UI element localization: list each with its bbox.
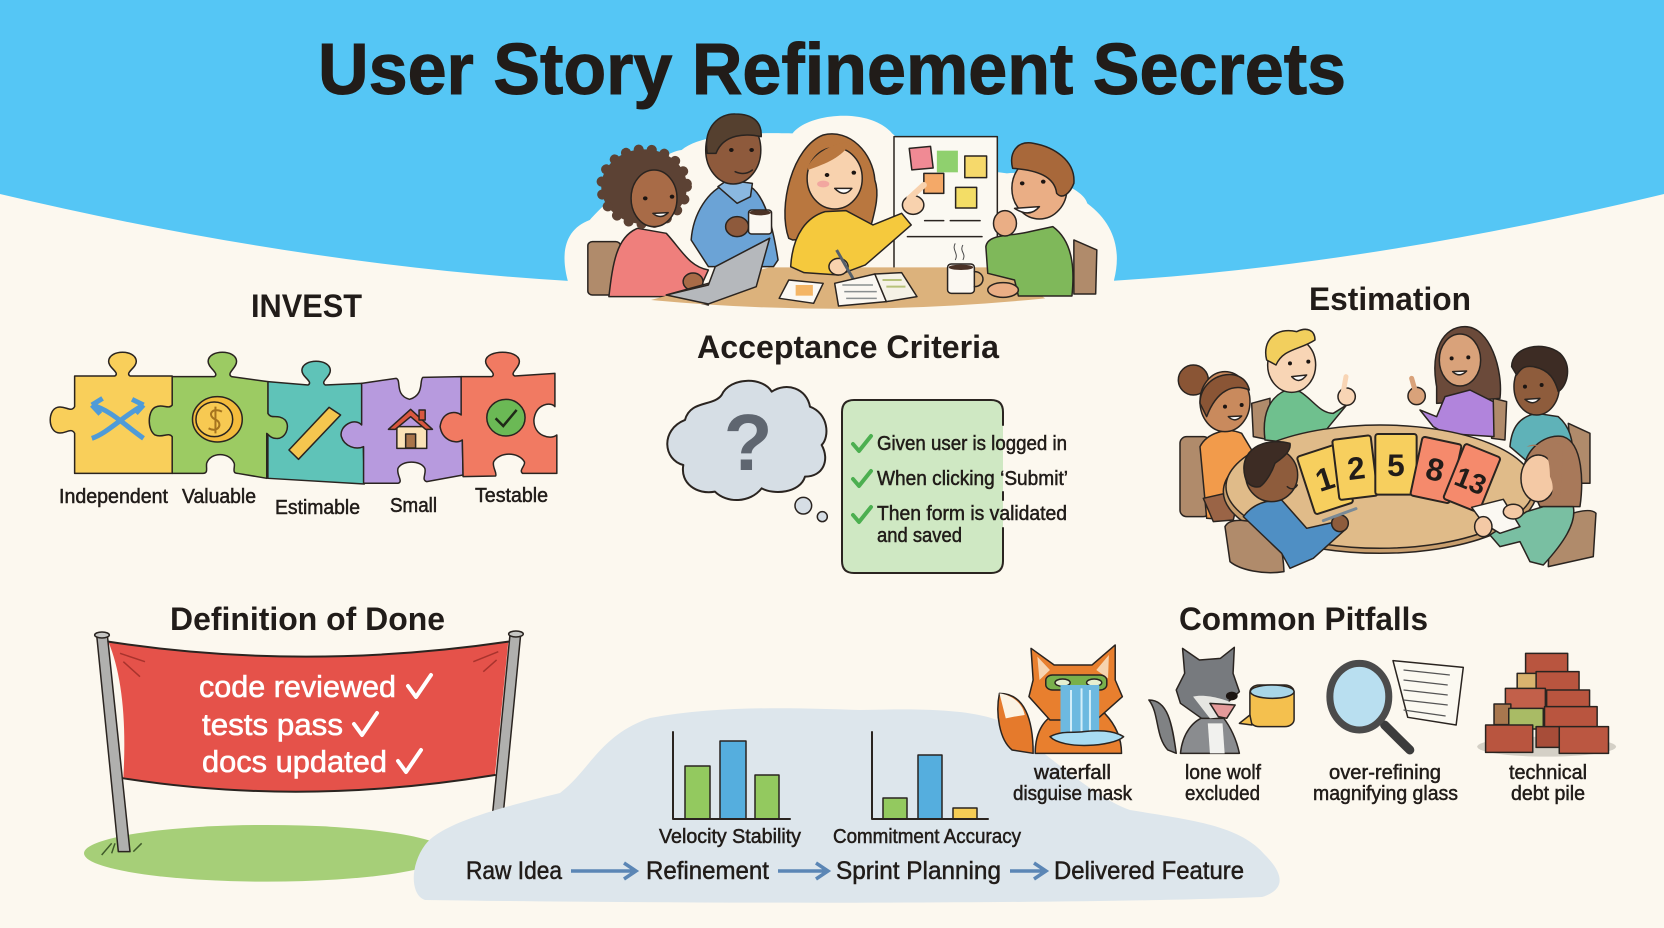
banner checklist text — [199, 669, 431, 779]
criteria text: When clicking ‘Submit’ — [877, 468, 1068, 490]
flow labels and arrows: Delivered Feature — [1054, 857, 1244, 885]
pitfall illustrations — [998, 645, 1616, 757]
heading: Common Pitfalls: Common Pitfalls — [1179, 601, 1428, 637]
piece: purple small — [341, 377, 463, 483]
piece labels — [59, 485, 548, 519]
person: long hair, purple — [1408, 327, 1507, 440]
card: 2 — [1332, 435, 1378, 500]
flow labels and arrows — [466, 857, 1244, 885]
icon: magnifying glass and document — [1330, 661, 1463, 750]
sky header band — [0, 0, 1664, 281]
banner checklist text: docs updated — [202, 744, 387, 779]
flow labels and arrows: Sprint Planning — [836, 857, 1001, 885]
pitfall labels: disguise mask — [1013, 783, 1133, 805]
person: front left, blue shirt — [1225, 442, 1356, 573]
piece: red testable — [440, 352, 557, 477]
piece: teal estimable — [268, 361, 364, 484]
pitfall labels: excluded — [1185, 783, 1260, 805]
flow labels and arrows: Raw Idea — [466, 857, 562, 885]
icon: lone wolf — [1149, 647, 1294, 753]
icon: thought cloud with question mark — [667, 381, 827, 522]
person: bun hair, orange — [1178, 365, 1252, 522]
grass — [84, 825, 449, 882]
card: 5: 5 — [1387, 447, 1405, 483]
acceptance criteria checklist card — [842, 400, 1068, 573]
title: User Story Refinement Secrets — [318, 30, 1346, 110]
piece labels: Small — [390, 495, 437, 517]
heading: Estimation: Estimation — [1309, 281, 1471, 317]
puzzle pieces — [50, 352, 557, 484]
person in yellow pointing at board — [785, 134, 924, 280]
criteria text: Then form is validated — [877, 503, 1067, 525]
card: 8: 8 — [1423, 450, 1447, 489]
banner checklist text: code reviewed — [199, 669, 396, 704]
pitfall labels: magnifying glass — [1313, 783, 1458, 805]
banner checklist text: tests pass — [202, 707, 343, 742]
person in blue shirt with mug — [691, 114, 778, 267]
round table — [1223, 425, 1537, 553]
heading: Definition of Done: Definition of Done — [170, 601, 445, 637]
criteria checks — [853, 436, 871, 522]
red banner cloth — [108, 642, 508, 792]
pitfall labels: lone wolf — [1185, 762, 1261, 784]
icon: technical debt brick pile — [1477, 653, 1616, 757]
section: Estimation — [1178, 281, 1596, 573]
pitfall labels: technical — [1509, 762, 1587, 784]
pitfall labels — [1013, 762, 1587, 805]
table — [651, 267, 1045, 309]
hero illustration: team refining stories — [565, 114, 1117, 323]
person with curly hair and laptop — [588, 149, 770, 305]
banner illustration — [84, 631, 523, 882]
criteria text: and saved — [877, 525, 962, 547]
re-drawn laptop front — [666, 238, 770, 304]
chart: Velocity Stability — [659, 732, 801, 848]
heading: INVEST: INVEST — [251, 288, 362, 324]
flow labels and arrows: Refinement — [646, 857, 769, 885]
person: blond, green sweater — [1252, 329, 1355, 445]
heading: Acceptance Criteria: Acceptance Criteria — [697, 329, 999, 365]
piece labels: Estimable — [275, 497, 360, 519]
criteria text — [877, 433, 1068, 547]
card: 13 — [1443, 443, 1501, 513]
right pole — [493, 635, 521, 813]
papers and mug on table — [779, 243, 983, 306]
card: 5 — [1375, 434, 1417, 495]
hero cloud backdrop — [565, 116, 1117, 323]
pitfall labels: waterfall — [1033, 762, 1111, 784]
piece: yellow independent — [50, 352, 172, 473]
chart: Commitment Accuracy — [833, 732, 1021, 848]
chart: Velocity Stability: Velocity Stability — [659, 826, 801, 848]
planning poker illustration — [1178, 327, 1596, 573]
whiteboard with sticky notes — [894, 137, 997, 268]
piece labels: Testable — [475, 485, 548, 507]
pitfall labels: over-refining — [1329, 762, 1441, 784]
person in green shirt — [986, 143, 1097, 297]
section: INVEST — [50, 288, 557, 519]
card: 2: 2 — [1345, 449, 1367, 487]
icon: thought cloud with question mark: ? — [724, 398, 772, 487]
criteria text: Given user is logged in — [877, 433, 1067, 455]
flow cloud shape — [414, 708, 1280, 903]
person: dark hair, teal — [1510, 346, 1590, 483]
bottom cloud: delivery flow and metrics — [414, 708, 1280, 903]
section: Definition of Done — [84, 601, 523, 882]
pitfall labels: debt pile — [1511, 783, 1585, 805]
piece: green valuable — [149, 352, 287, 478]
piece labels: Independent — [59, 486, 168, 508]
piece labels: Valuable — [182, 486, 256, 508]
left pole — [97, 635, 130, 852]
person: front right, notepad — [1472, 436, 1596, 567]
card: 8 — [1410, 436, 1462, 503]
chart: Commitment Accuracy: Commitment Accuracy — [833, 826, 1021, 848]
section: Acceptance Criteria — [667, 329, 1068, 573]
card: 1 — [1297, 445, 1353, 515]
card: 13: 13 — [1450, 461, 1491, 501]
icon: fox with waterfall mask — [998, 645, 1124, 753]
section: Common Pitfalls — [998, 601, 1616, 805]
card: 1: 1 — [1311, 459, 1339, 499]
